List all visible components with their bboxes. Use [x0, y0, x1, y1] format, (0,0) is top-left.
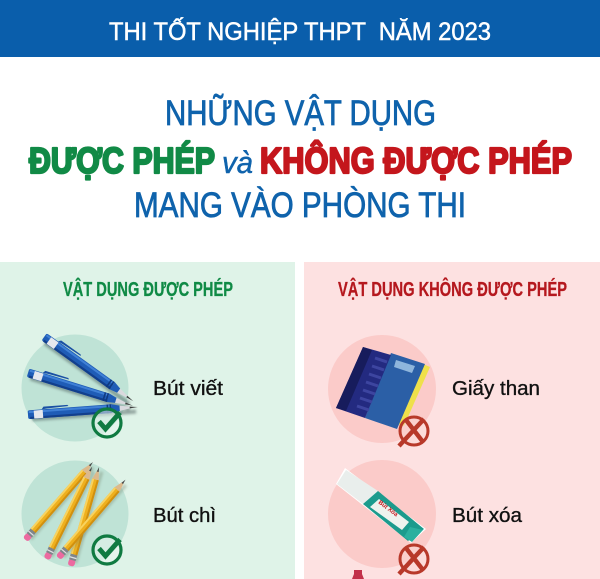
item: correction pen: Bút Xóa — [377, 500, 399, 519]
title: ĐƯỢC PHÉP — [29, 140, 215, 181]
item: ballpoint pens — [22, 331, 138, 442]
item: correction pen — [328, 460, 436, 574]
item: pencils — [22, 460, 130, 568]
item: bottle top at cut-off — [352, 570, 364, 579]
label: pencils: Bút chì — [153, 505, 216, 527]
header banner: THI TỐT NGHIỆP THPT NĂM 2023 — [109, 16, 491, 46]
title — [29, 93, 572, 225]
label: correction pen: Bút xóa — [452, 505, 523, 527]
panel heading: allowed: VẬT DỤNG ĐƯỢC PHÉP — [63, 277, 233, 301]
item: carbon paper — [328, 335, 436, 446]
panel: allowed items — [0, 262, 295, 579]
title: MANG VÀO PHÒNG THI — [134, 186, 466, 225]
label: ballpoint pens: Bút viết — [153, 378, 223, 400]
label: carbon paper: Giấy than — [452, 378, 540, 400]
header banner — [0, 0, 600, 57]
title: NHỮNG VẬT DỤNG — [165, 93, 436, 133]
panel: prohibited items — [304, 262, 600, 579]
title: và — [222, 145, 253, 180]
